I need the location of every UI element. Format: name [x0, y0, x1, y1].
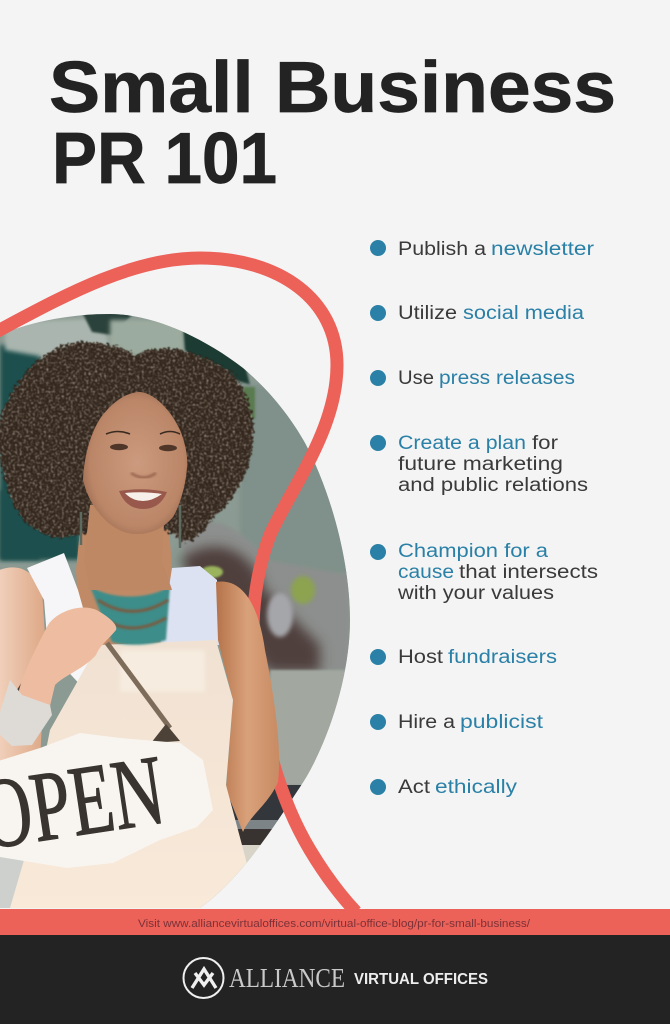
item: publicist: publicist — [460, 712, 544, 733]
photo: woman holding open sign — [0, 342, 279, 908]
item: press releases: Use — [398, 368, 434, 389]
red url band — [0, 909, 670, 935]
earrings — [81, 505, 180, 548]
wordmark: ALLIANCE — [229, 963, 345, 993]
dark footer — [0, 935, 670, 1024]
bracelet — [0, 680, 52, 746]
white shirt left — [27, 553, 88, 682]
item: create a plan: future marketing — [398, 454, 563, 475]
item: create a plan — [370, 433, 588, 496]
title: Small Business — [49, 48, 616, 128]
item: newsletter: newsletter — [491, 239, 595, 260]
nose — [131, 473, 156, 478]
item: newsletter — [370, 239, 595, 260]
bullet list — [370, 239, 598, 798]
item: champion for a cause: cause — [398, 562, 454, 583]
lavender shirt right — [160, 566, 222, 645]
right strap — [107, 643, 170, 728]
item: create a plan: Create a plan — [398, 433, 526, 454]
strap knot — [152, 724, 180, 742]
left strap — [17, 682, 22, 691]
item: newsletter: Publish a — [398, 239, 486, 260]
hair — [0, 342, 254, 543]
item: publicist — [370, 712, 544, 733]
item: social media: social media — [463, 303, 584, 324]
item: press releases: press releases — [439, 368, 575, 389]
item: champion for a cause — [370, 541, 598, 604]
open sign — [0, 733, 213, 868]
face — [83, 392, 187, 534]
tagline: VIRTUAL OFFICES — [354, 971, 488, 988]
icon: alliance emblem — [184, 958, 224, 998]
eyes and brows — [106, 432, 180, 451]
neck and chest — [76, 528, 172, 645]
title: PR 101 — [52, 119, 277, 199]
item: champion for a cause: that intersects — [459, 562, 598, 583]
item: create a plan: and public relations — [398, 475, 588, 496]
item: champion for a cause: Champion for a — [398, 541, 548, 562]
logo — [184, 958, 488, 998]
item: social media: Utilize — [398, 303, 457, 324]
left arm — [0, 567, 46, 770]
item: create a plan: for — [532, 433, 559, 454]
item: fundraisers: fundraisers — [448, 647, 557, 668]
red url band: Visit www.alliancevirtualoffices.com/virtual-office-blog/pr-for-small-business/ — [138, 918, 531, 930]
neck front — [84, 505, 172, 590]
item: press releases — [370, 368, 575, 389]
photo background: shop window and plants — [0, 300, 360, 920]
item: publicist: Hire a — [398, 712, 455, 733]
smile — [119, 489, 167, 509]
item: fundraisers: Host — [398, 647, 444, 668]
item: fundraisers — [370, 647, 557, 668]
item: social media — [370, 303, 584, 324]
red curve — [0, 258, 356, 912]
item: ethically: ethically — [435, 777, 518, 798]
item: champion for a cause: with your values — [397, 583, 554, 604]
necklace — [90, 586, 170, 645]
title — [49, 48, 616, 199]
apron — [10, 640, 250, 908]
item: ethically — [370, 777, 518, 798]
item: ethically: Act — [398, 777, 431, 798]
hand — [18, 608, 116, 706]
right arm — [216, 582, 279, 832]
